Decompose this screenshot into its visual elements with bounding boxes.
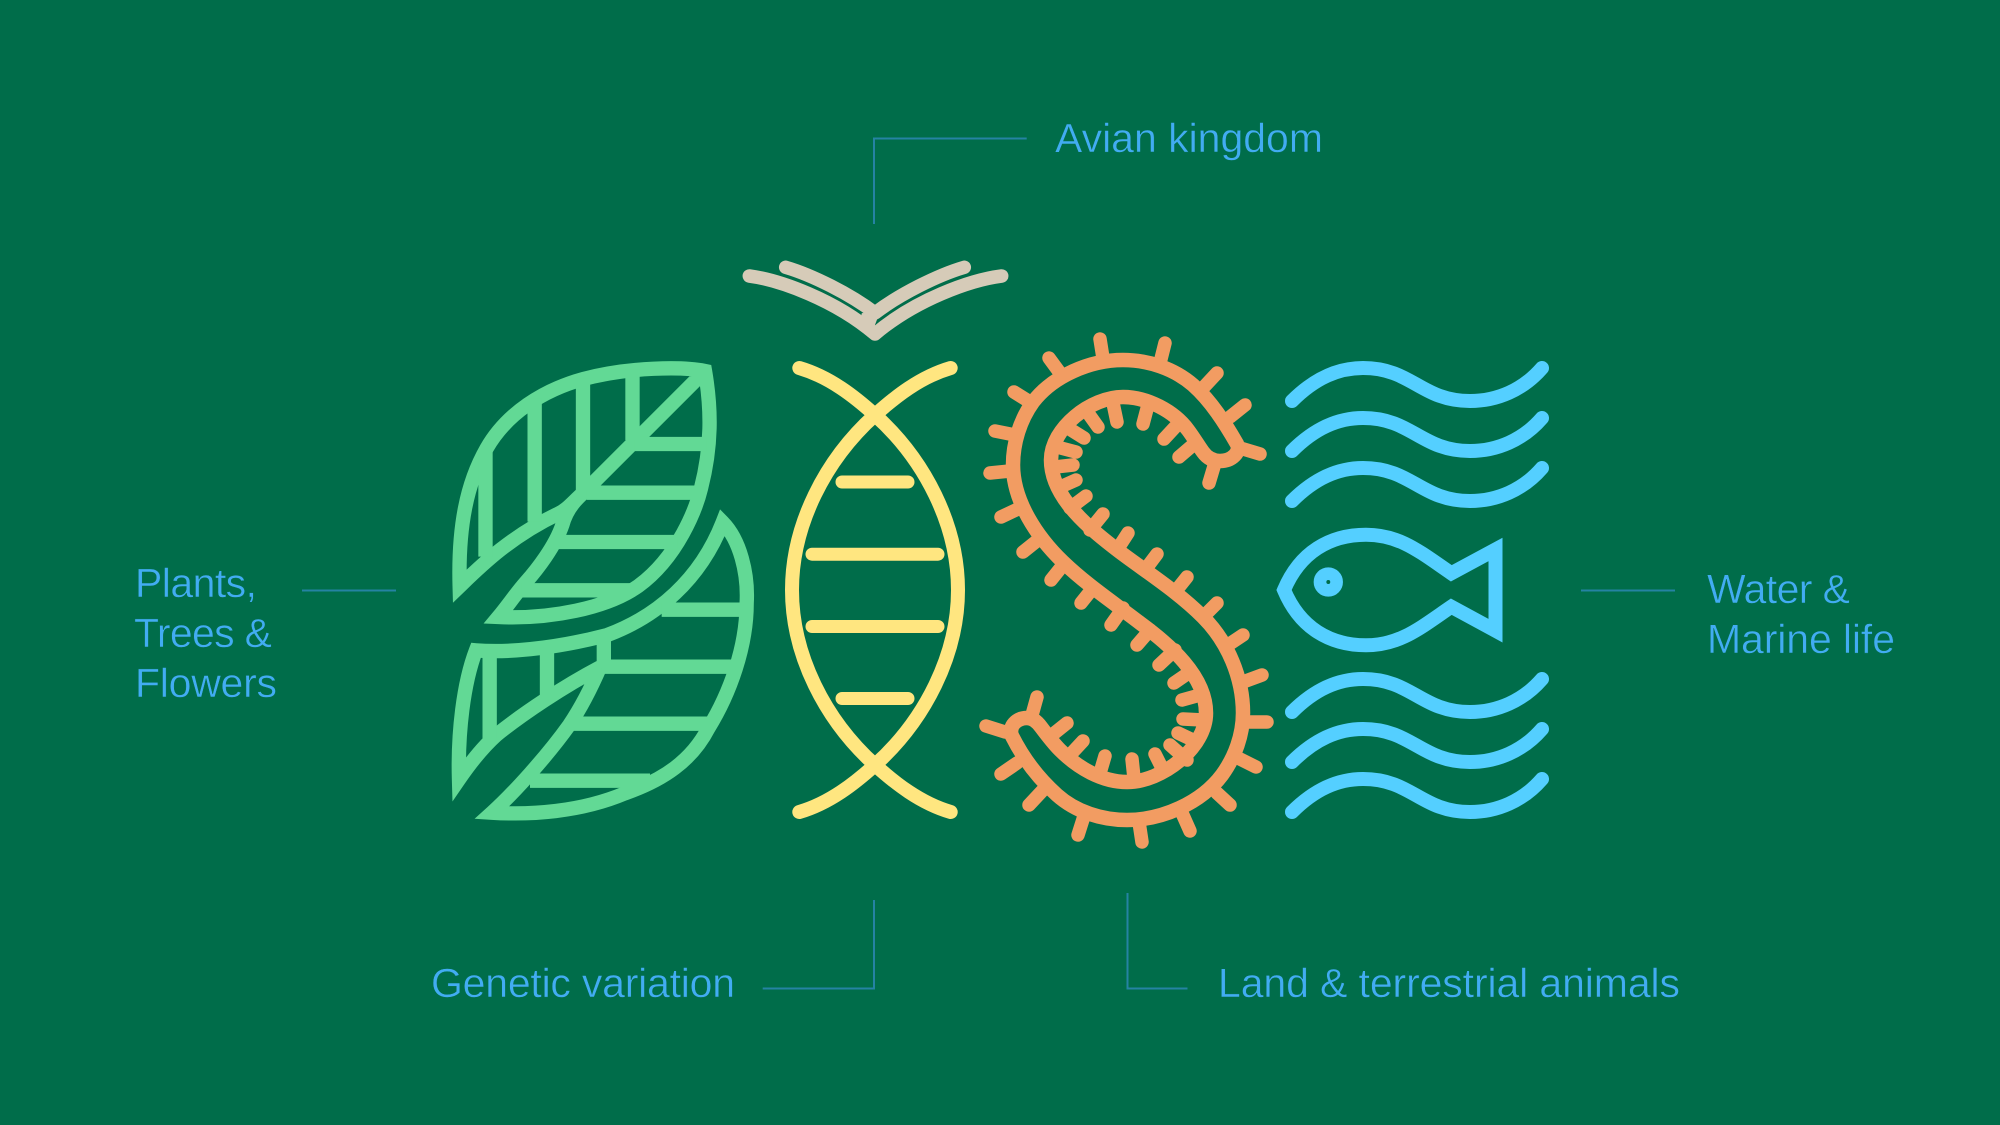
icon: fish: [1284, 535, 1496, 645]
callout: plants: [134, 560, 396, 706]
callout: water and marine life: Marine life: [1707, 616, 1895, 662]
icon: leaves: [459, 368, 747, 813]
icon: bottom leaf: [459, 522, 747, 813]
icon: bird wings: [749, 267, 1002, 334]
icon: waves and fish: [1284, 368, 1542, 812]
callout: plants: Flowers: [135, 660, 277, 706]
callout: genetic variation: [431, 900, 874, 1006]
icon: worm S: [986, 339, 1267, 842]
icon: top leaf: [459, 368, 710, 617]
callout: land animals: Land & terrestrial animals: [1218, 960, 1680, 1006]
callout: avian kingdom: Avian kingdom: [1055, 115, 1323, 161]
callout: genetic variation: Genetic variation: [431, 960, 735, 1006]
callout: avian kingdom: [874, 115, 1323, 224]
icon: lower waves: [1292, 679, 1542, 812]
callout: plants: Plants,: [135, 560, 257, 606]
icon: DNA helix: [792, 368, 958, 812]
callout: water and marine life: [1581, 566, 1895, 662]
icon: upper waves: [1292, 368, 1542, 501]
callout: water and marine life: Water &: [1707, 566, 1850, 612]
callout: land animals: [1128, 893, 1680, 1006]
callout: plants: Trees &: [134, 610, 272, 656]
